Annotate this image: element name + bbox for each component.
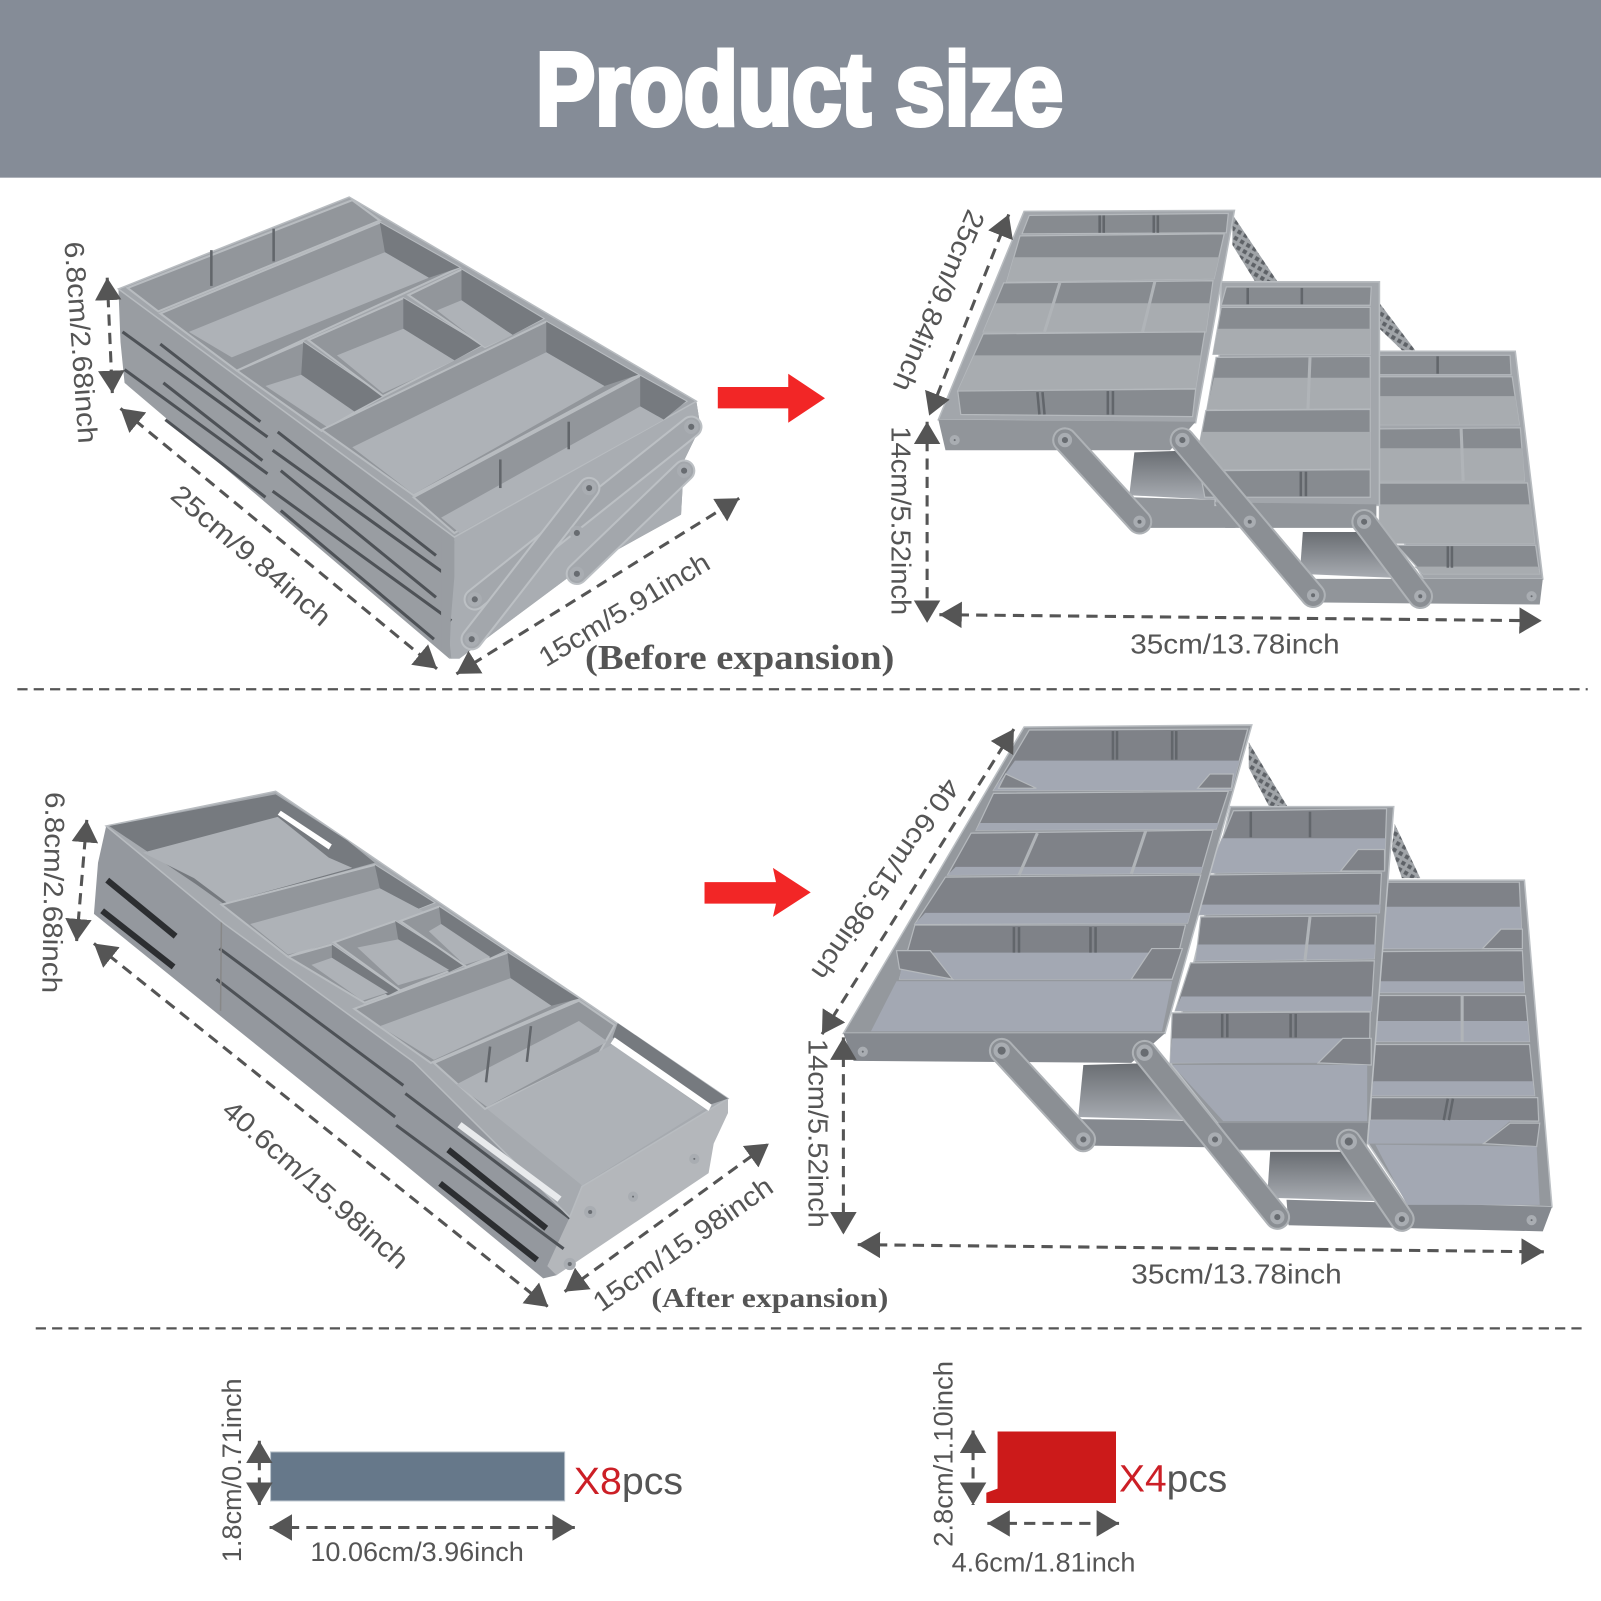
third tray [1310,351,1543,604]
tab height label: 2.8cm/1.10inch [929,1361,959,1547]
hinge arms [996,1045,1407,1224]
title: Product size [536,32,1063,147]
hinge arms [1060,435,1424,600]
lower shelves [1078,1063,1397,1202]
dimension: 35cm width opened expanded [858,1245,1544,1289]
dimension: 15cm width after: 15cm/15.98inch [587,1170,779,1318]
tab width dimension [987,1522,1119,1525]
dimension: 6.8cm height after: 6.8cm/2.68inch [36,792,71,993]
quantity x4: X4pcs [1119,1459,1227,1501]
ladder straps [1232,214,1415,350]
dimension: 14cm height opened: 14cm/5.52inch [885,426,916,615]
tab [986,1432,1116,1503]
panel: closed tray before expansion [118,197,700,659]
third tray [1287,880,1552,1231]
stacked tray body [118,289,700,659]
tab width label: 4.6cm/1.81inch [952,1547,1135,1577]
caption: before expansion: (Before expansion) [585,638,894,677]
dimension: 35cm width opened expanded: 35cm/13.78inch [1131,1258,1342,1289]
second tray [1170,807,1394,1150]
panel: opened tray after expansion [843,725,1552,1231]
dimension: 14cm height opened expanded: 14cm/5.52inch [803,1039,834,1228]
front tray [843,725,1252,1063]
dimension: 40.6cm length opened [805,729,1014,1034]
strip [271,1452,565,1501]
strip height label: 1.8cm/0.71inch [217,1378,247,1562]
quantity x8: X8pcs [574,1461,683,1503]
dimension: 40.6cm length after: 40.6cm/15.98inch [216,1094,415,1275]
dimension: 25cm length opened: 25cm/9.84inch [887,205,991,396]
arrow: red before [718,374,825,423]
dimension: 6.8cm height before: 6.8cm/2.68inch [58,240,103,444]
dimension: 15cm width before [456,498,739,674]
dimension: 15cm width after [565,1144,779,1318]
lower shelves [1129,450,1419,579]
dimension: 25cm length before [120,408,437,669]
second tray [1195,282,1379,528]
accessory: red divider tab x4 [929,1361,1227,1577]
tray compartments [118,197,696,537]
ladder straps [1249,742,1420,878]
panel: opened tray before expansion [938,210,1543,604]
dimension: 15cm width before: 15cm/5.91inch [533,546,715,673]
stacked tray body [94,826,728,1278]
arrow: red after [705,868,811,917]
accessory: grey divider strip x8 [217,1378,683,1567]
dimension: 35cm width opened: 35cm/13.78inch [1130,628,1340,659]
divider line [36,1327,1588,1329]
dimension: 25cm length before: 25cm/9.84inch [165,479,337,632]
strip width label: 10.06cm/3.96inch [310,1537,524,1567]
hinge arms [467,422,696,644]
strip width dimension [270,1526,575,1529]
tab height dimension [972,1430,975,1505]
dimension: 25cm length opened [887,205,1009,416]
panel: closed tray after expansion [94,791,728,1278]
front tray [938,210,1234,450]
tray compartments [106,791,728,1217]
header banner [0,0,1601,178]
dimension: 40.6cm length after [94,943,548,1307]
caption: after expansion: (After expansion) [651,1282,888,1313]
divider line [17,688,1588,690]
strip height dimension [258,1441,261,1505]
dimension: 40.6cm length opened: 40.6cm/15.98inch [805,773,966,986]
dimension: 6.8cm height after [36,792,87,993]
dimension: 35cm width opened [939,615,1542,659]
